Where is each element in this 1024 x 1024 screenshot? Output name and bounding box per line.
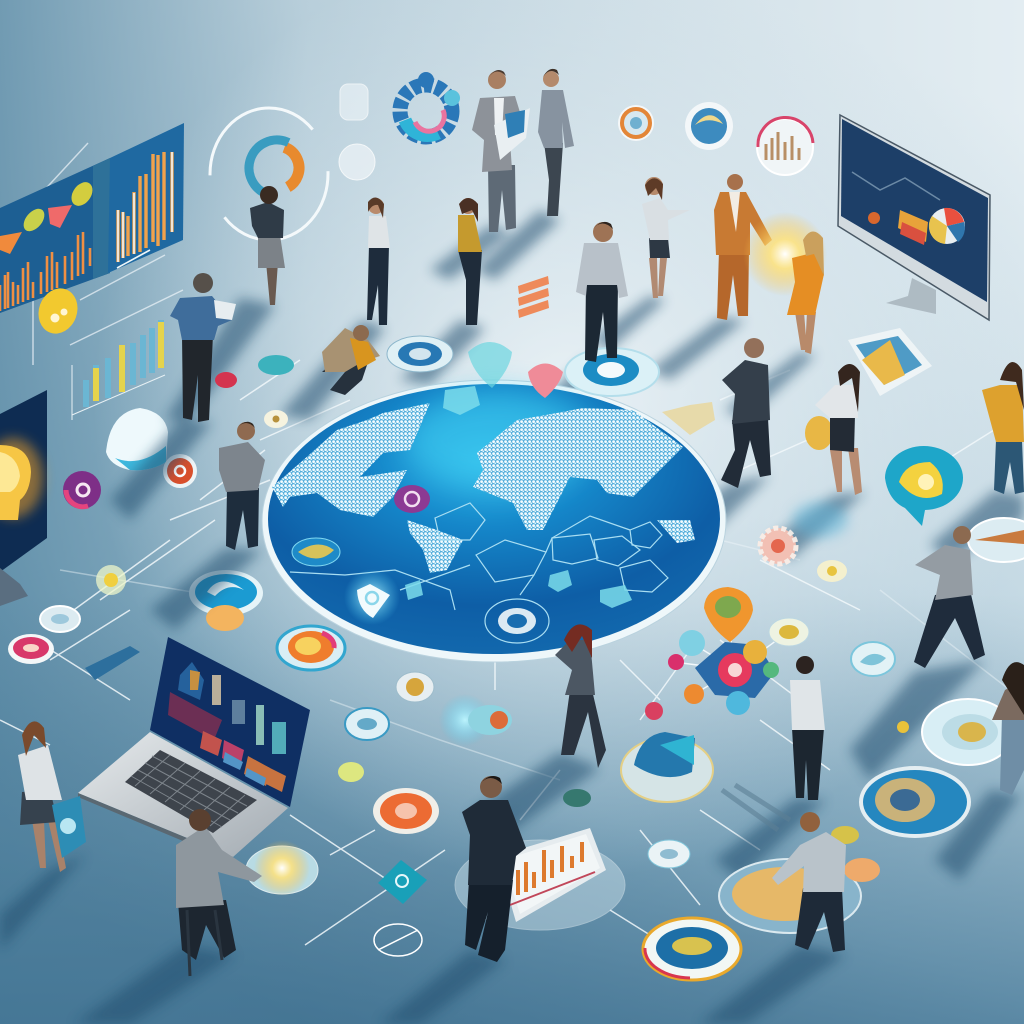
icon: tablet colour card [848,328,932,396]
person: man dark suit mid [721,338,771,488]
person: man walking right [914,526,985,668]
continent: south america [407,520,463,573]
globe rim [262,380,726,662]
person: man white shirt center [576,222,628,362]
right side icons [643,416,1024,980]
laptop [78,637,310,862]
icon: faint badges [339,84,375,180]
person: woman dark skirt right [815,364,862,495]
icon: cyan glow badge [439,694,512,746]
icon: small teal chip [563,789,591,807]
icon: blue hat pedestal [621,732,713,802]
laptop base [78,732,288,857]
person: woman white top lower right [790,656,825,800]
icon: pie chart badge [757,117,813,175]
person: man blue shirt [170,273,236,422]
icon: orange ring [618,105,654,141]
icon: purple badge [63,471,101,509]
person: seated man [176,809,262,976]
icon: white ring badge [498,608,536,634]
floor plate: tablet [455,828,625,930]
icon: gold ring [769,618,809,646]
continent: eurasia and africa [473,408,683,530]
cluster lines [674,610,788,694]
person: man gray shirt top [538,69,574,216]
cluster red node [718,653,752,687]
top icons [210,72,813,318]
pins above globe [215,328,932,435]
icon: orange yellow disc under man [719,826,880,933]
icon: small yellow dot [897,721,909,733]
person: woman yellow top [458,198,482,325]
icon: small blue disc [345,708,389,740]
icon: blue blot shadow [792,502,848,538]
cluster hub [695,642,775,698]
person: man orange suit [714,174,772,320]
icon: light swirl disc [851,642,895,676]
icon: rainbow oval bottom [643,918,741,980]
icon: small yellow disc [264,410,288,428]
floor bar chart [72,320,165,420]
monitor [838,115,990,320]
person: woman right edge lower [992,662,1024,795]
person: woman white top [367,197,390,325]
icon: gear [400,72,460,137]
icon: orange disc [373,788,439,834]
person: woman left white top [18,721,86,872]
icon: blue disc [40,606,80,632]
icon: white heart badge [344,569,400,625]
icon: teal disc [258,355,294,375]
person: woman yellow top right edge [982,362,1024,494]
left dashboard panels [0,123,184,339]
panel strip [85,646,140,680]
icon: yellow spark [338,762,364,782]
icon: small round badge [648,840,690,868]
icon: cloud badge [106,408,168,470]
laptop screen [150,637,310,807]
icon: faded yellow map [662,402,715,435]
glow: bright hand light [743,212,827,296]
continent: australia [657,520,695,543]
icon: teal diamond [378,860,427,904]
device: lightbulb tablet [0,390,47,572]
icon: yellow map badge [292,538,340,566]
icon: gold disc [817,560,847,582]
icon: stacked stripes [518,276,549,318]
icon: purple pin [394,485,430,513]
icon: orange blob [206,605,244,631]
icon: teal pin [468,342,512,388]
person: man gray shirt left [219,422,265,550]
icon: dark streaks [722,785,790,830]
icon: pink gear [760,528,796,564]
person: woman walking center [555,624,606,768]
continent: north america [272,403,430,517]
monitor frame [838,115,990,320]
person: woman gray skirt [250,186,285,305]
hexagon network [290,503,668,643]
cluster orange pin [704,587,753,642]
globe surface [268,384,720,654]
icon: blue ring disc top [387,336,453,372]
icon: large blue disc [859,766,971,838]
laptop keys [131,755,247,827]
cluster nodes [645,630,779,720]
monitor chart [852,172,965,245]
person: cropped figure left edge [0,568,28,606]
globe glow [405,390,595,490]
person: man white shirt bottom right [772,812,846,952]
panel: right bar chart [108,123,184,273]
monitor stand [886,278,936,314]
floor shadows [0,210,1024,1024]
network connector lines [0,143,1010,945]
icon: blue swirl disc [565,348,659,396]
icon: ring with gear [210,108,328,240]
globe map [262,380,726,662]
icon: outlined ring [374,924,422,956]
icon: yellow coin [32,283,84,339]
icon: blue circle [685,102,733,150]
icon: target disc [189,570,263,616]
icon: speech bubble [885,446,963,526]
person: woman orange dress [787,231,824,354]
icon: cyan hexes [405,386,632,608]
monitor screen [841,119,988,302]
icon: pink pin [528,364,563,398]
icon: red disc [8,634,54,664]
icon: gold oval [396,672,434,702]
person: man dark suit bottom [462,776,526,962]
icon: yellow spark [96,565,126,595]
icons: left column [8,408,345,680]
panel: left chart [0,158,110,313]
icon: rainbow disc [277,626,345,670]
icon: right rim disc [968,518,1024,562]
centre-bottom icons [246,672,790,956]
icon: red blob [215,372,237,388]
person: crouching worker [322,325,380,395]
icon: target disc right [922,699,1014,765]
icon: seat glow disc [246,840,318,896]
person: man gray jacket top [472,70,530,232]
icon: flower cluster [645,587,788,720]
icon: orange badge [163,454,197,488]
person: woman dark skirt [642,177,690,298]
laptop screen graphics [168,662,286,792]
icon: yellow oval [805,416,833,450]
laptop keyboard [125,750,257,833]
